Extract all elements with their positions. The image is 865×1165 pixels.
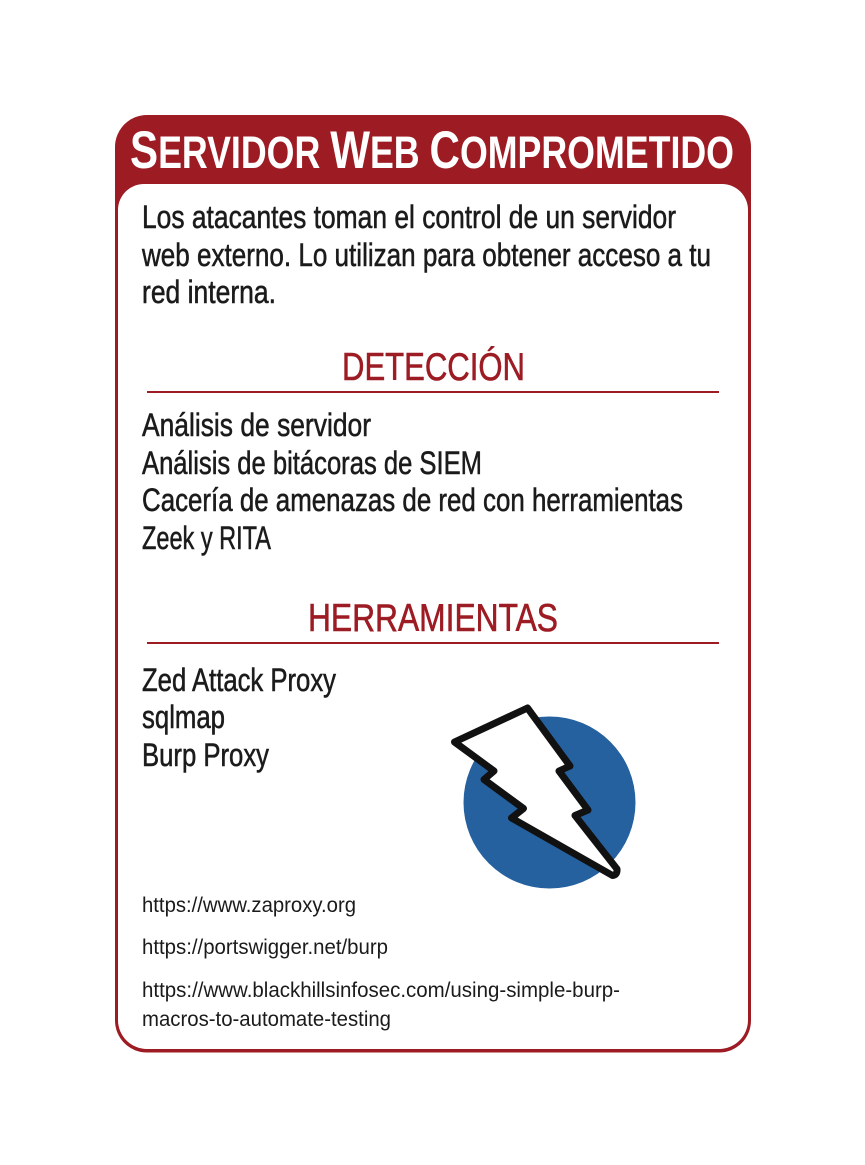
tools list — [142, 662, 336, 773]
reference links: https://portswigger.net/burp — [142, 935, 388, 959]
card inner panel — [118, 184, 748, 1049]
detection list: Análisis de bitácoras de SIEM — [142, 445, 482, 481]
description: Los atacantes toman el control de un servidor — [142, 199, 676, 235]
detection list: Análisis de servidor — [142, 407, 371, 443]
detection list: Cacería de amenazas de red con herramientas — [142, 482, 683, 518]
description: web externo. Lo utilizan para obtener acceso a tu — [141, 237, 711, 273]
detection list: Zeek y RITA — [142, 520, 271, 556]
reference links: https://www.zaproxy.org — [142, 893, 356, 917]
description: red interna. — [142, 274, 276, 310]
detection list — [142, 407, 683, 556]
title: SERVIDOR WEB COMPROMETIDO — [130, 121, 734, 180]
reference links — [142, 893, 620, 1031]
description — [141, 199, 711, 310]
tools list: Burp Proxy — [142, 737, 269, 773]
card frame — [115, 115, 751, 1052]
heading: detección: DETECCIÓN — [342, 346, 525, 389]
reference links: https://www.blackhillsinfosec.com/using-simple-burp- — [142, 978, 620, 1002]
tools list: Zed Attack Proxy — [142, 662, 336, 698]
icon: lightning bolt logo — [454, 708, 636, 888]
heading: herramientas: HERRAMIENTAS — [308, 597, 558, 640]
reference links: macros-to-automate-testing — [142, 1007, 391, 1031]
tools list: sqlmap — [142, 699, 225, 735]
